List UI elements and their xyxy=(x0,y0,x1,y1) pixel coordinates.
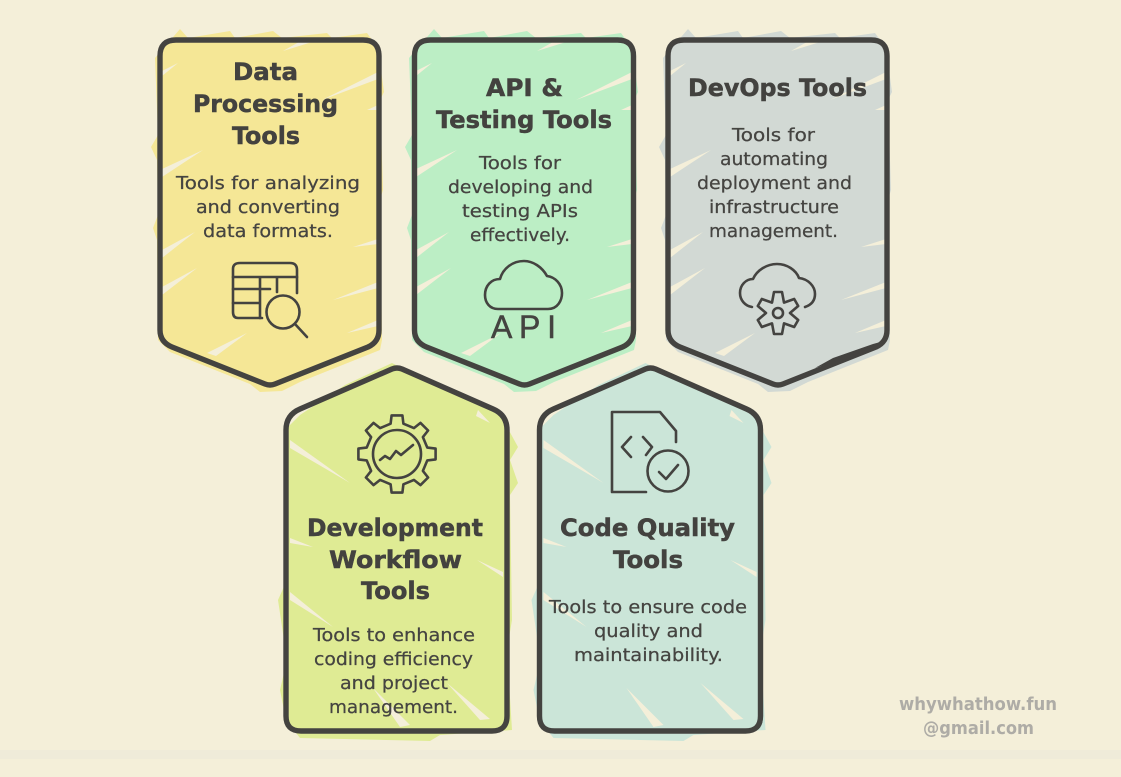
icon: API cloud xyxy=(485,261,562,345)
panel: Code Quality Tools: quality and xyxy=(594,621,703,642)
panel: DevOps Tools: deployment and xyxy=(697,173,852,194)
panel: DevOps Tools: management. xyxy=(709,221,838,242)
watermark: @gmail.com xyxy=(923,718,1034,739)
panel: Development Workflow Tools: Workflow xyxy=(329,546,462,574)
panel: Code Quality Tools: maintainability. xyxy=(574,645,723,666)
panel: Development Workflow Tools: coding efficiency xyxy=(314,649,473,670)
panel: API & Testing Tools: effectively. xyxy=(470,225,570,246)
panel: Development Workflow Tools: Tools to enhance xyxy=(312,625,475,646)
panel: Development Workflow Tools: Tools xyxy=(361,577,430,605)
watermark xyxy=(899,694,1057,739)
watermark: whywhathow.fun xyxy=(899,694,1057,715)
panel: Data Processing Tools: Tools xyxy=(232,122,300,150)
panel: DevOps Tools: automating xyxy=(720,149,828,170)
icon: API cloud: API xyxy=(491,309,556,345)
icon: cloud with gear xyxy=(740,264,815,334)
panel: Code Quality Tools: Tools to ensure code xyxy=(548,597,747,618)
panel: API & Testing Tools: Testing Tools xyxy=(436,106,612,134)
panel: API & Testing Tools: testing APIs xyxy=(462,201,578,222)
panel: DevOps Tools: DevOps Tools xyxy=(688,74,867,102)
panel: DevOps Tools: infrastructure xyxy=(709,197,839,218)
icon: gear with chart xyxy=(358,415,436,493)
panel: API & Testing Tools: Tools for xyxy=(478,153,562,174)
panel: DevOps Tools: Tools for xyxy=(731,125,816,146)
icon: table with magnifier xyxy=(233,263,307,337)
panel: Code Quality Tools: Code Quality xyxy=(560,514,735,542)
panel: DevOps Tools xyxy=(659,29,892,392)
panel: API & Testing Tools: developing and xyxy=(448,177,593,198)
panel: Data Processing Tools: data formats. xyxy=(203,221,333,242)
panel: Development Workflow Tools: management. xyxy=(329,697,458,718)
panel: API & Testing Tools xyxy=(405,29,638,392)
panel: Data Processing Tools: Tools for analyzing xyxy=(175,173,360,194)
panel: Development Workflow Tools xyxy=(278,363,518,741)
panel: Development Workflow Tools: Development xyxy=(307,514,483,542)
panel: Data Processing Tools: and converting xyxy=(196,197,340,218)
icon: code file with check xyxy=(612,412,688,492)
panel: Data Processing Tools xyxy=(151,29,384,392)
panel: Data Processing Tools: Processing xyxy=(193,90,338,118)
panel: Data Processing Tools: Data xyxy=(233,58,298,86)
panel: Code Quality Tools: Tools xyxy=(613,546,683,574)
panel: Development Workflow Tools: and project xyxy=(340,673,448,694)
panel: Code Quality Tools xyxy=(532,363,772,741)
panel: API & Testing Tools: API & xyxy=(486,74,563,102)
